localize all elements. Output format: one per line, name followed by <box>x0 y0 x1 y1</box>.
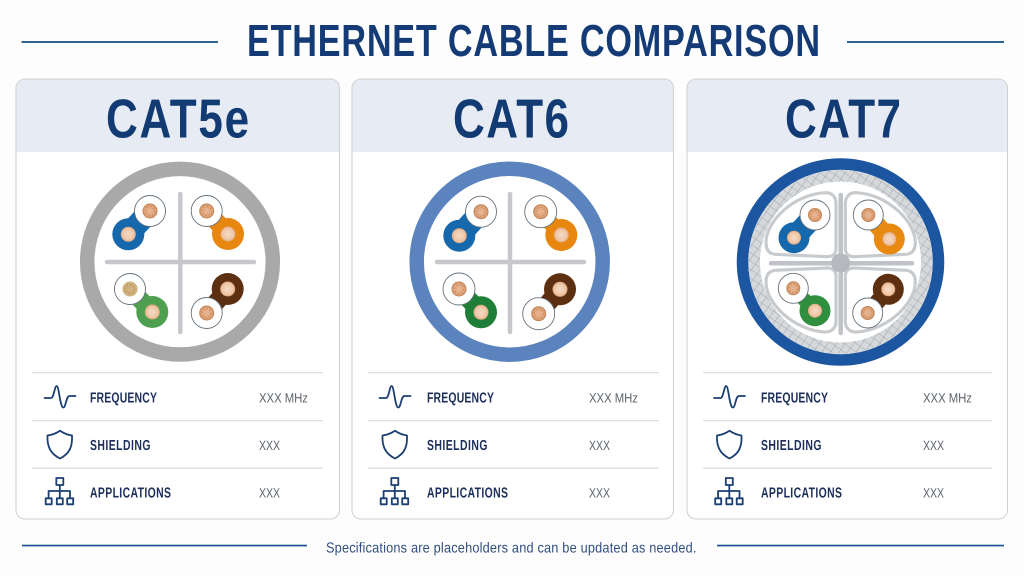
spec rows: CAT6: XXX MHz <box>589 390 638 406</box>
spec rows: CAT5e: XXX MHz <box>259 390 308 406</box>
spec rows: CAT7: XXX <box>923 438 944 453</box>
spec rows: CAT5e: SHIELDING <box>90 438 150 454</box>
pair: brown <box>523 273 576 330</box>
spec rows: CAT6: SHIELDING <box>427 438 487 454</box>
spec rows: CAT7 <box>703 373 992 504</box>
icon: network <box>46 478 73 504</box>
header: CAT7: CAT7 <box>785 88 901 150</box>
spec rows: CAT5e: APPLICATIONS <box>90 486 171 502</box>
spec rows: CAT7: XXX <box>923 486 944 501</box>
spec rows: CAT5e: FREQUENCY <box>90 390 157 406</box>
spec rows: CAT6 <box>368 373 659 504</box>
spec rows: CAT6: FREQUENCY <box>427 390 494 406</box>
spec rows: CAT5e: XXX <box>259 438 280 453</box>
spec rows: CAT7: APPLICATIONS <box>761 486 842 502</box>
icon: frequency <box>714 386 745 408</box>
header: CAT6: CAT6 <box>453 88 569 150</box>
icon: network <box>381 478 408 504</box>
spec rows: CAT7: XXX MHz <box>923 390 972 406</box>
panel: CAT5e <box>16 79 340 519</box>
header: CAT7 <box>688 80 1007 152</box>
header: CAT6 <box>352 80 673 152</box>
icon: shield <box>382 431 407 458</box>
spec rows: CAT6: XXX <box>589 486 610 501</box>
pair: green <box>443 273 497 328</box>
header: CAT5e: CAT5e <box>106 88 249 150</box>
cable cross-section: CAT6 <box>417 169 603 355</box>
icon: frequency <box>380 386 410 408</box>
title: ETHERNET CABLE COMPARISON <box>247 15 820 66</box>
icon: shield <box>47 431 72 458</box>
foil shields <box>766 193 915 332</box>
spec rows: CAT6: APPLICATIONS <box>427 486 508 502</box>
spec rows: CAT7: FREQUENCY <box>761 390 828 406</box>
pair: orange <box>853 200 905 254</box>
pair: orange <box>525 196 577 251</box>
cable cross-section: CAT7 <box>742 164 938 360</box>
spec rows: CAT5e <box>32 373 323 504</box>
pair: orange <box>191 196 244 250</box>
icon: network <box>715 478 743 504</box>
pair: blue <box>443 196 496 252</box>
pair: blue <box>112 196 166 250</box>
spec rows: CAT6: XXX <box>589 438 610 453</box>
footer note: Specifications are placeholders and can be updated as needed. <box>326 541 696 557</box>
pair: brown <box>853 274 904 328</box>
pair: brown <box>191 273 244 328</box>
spec rows: CAT5e: XXX <box>259 486 280 501</box>
header: CAT5e <box>16 80 339 152</box>
panel: CAT6 <box>352 79 674 519</box>
spec rows: CAT7: SHIELDING <box>761 438 821 454</box>
cable cross-section: CAT5e <box>87 169 273 354</box>
icon: frequency <box>44 386 76 408</box>
icon: shield <box>717 431 742 458</box>
panel: CAT7 <box>687 79 1008 519</box>
pair: green <box>114 274 168 328</box>
pair: green <box>778 273 830 326</box>
pair: blue <box>778 200 830 253</box>
